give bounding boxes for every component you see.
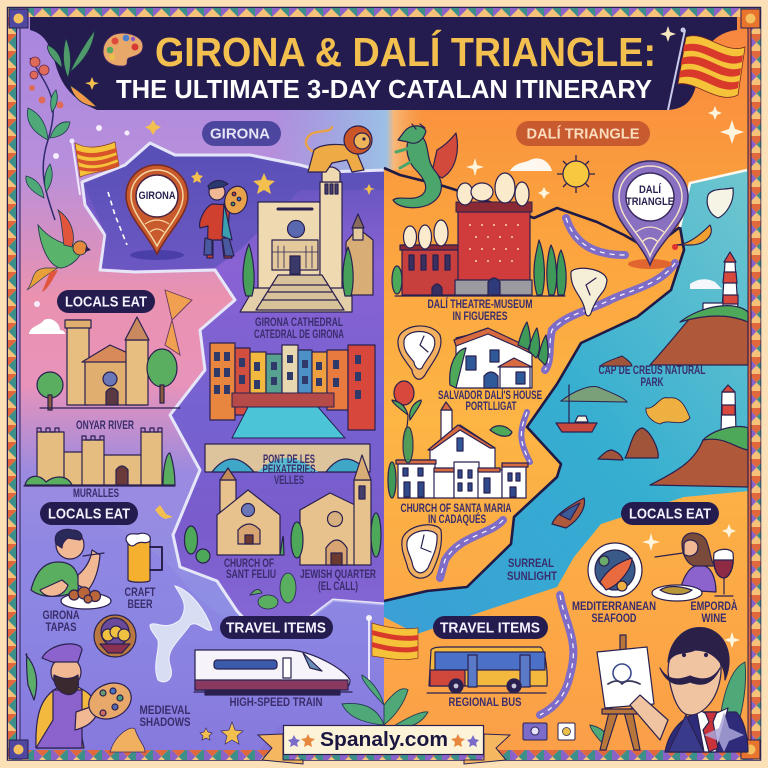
icon: Girona map pin: GIRONA [138,190,176,202]
stars lower left [200,722,243,744]
label: Medieval Shadows: MEDIEVAL [140,705,190,717]
icon: sparkle [85,77,99,90]
label: Pont de les Peixateries Velles: PEIXATERIES [262,464,316,476]
purple road 2 [545,263,675,370]
melting clock top [571,268,607,316]
high-speed train [194,650,352,695]
label: Girona Cathedral: CATEDRAL DE GIRONA [254,329,344,341]
map: province outline [82,143,384,625]
stone bridge [205,444,370,472]
stars [191,171,375,195]
label: Pont de les Peixateries Velles: PONT DE LES [263,454,315,466]
label: Surreal Sunlight: SUNLIGHT [507,571,557,583]
pill: Travel Items Dalí [433,616,548,639]
red tulip [392,381,421,440]
section pill: Girona: GIRONA [210,126,270,142]
map: Girona province [82,143,384,625]
icon: artist palette [103,33,143,66]
panel: Dalí side [384,17,749,752]
label: Church of Santa Maria [400,503,512,526]
icon: Girona map pin [126,165,188,260]
label: Jewish Quarter: (EL CALL) [318,581,358,593]
label: Empordà Wine: EMPORDÀ [690,600,738,613]
star [155,505,173,519]
label: High-Speed Train: HIGH-SPEED TRAIN [230,697,322,709]
basket [94,615,136,657]
label: Medieval Shadows [140,705,191,729]
Onyar River water [232,407,345,438]
label: Girona Cathedral [254,317,344,341]
film icon [558,723,575,740]
label: Church of Sant Feliu: CHURCH OF [224,558,274,570]
pill: Locals Eat 1 [57,290,155,313]
pill: Locals Eat 1: LOCALS EAT [65,294,147,310]
cliff lower [650,426,748,487]
label: Church of Santa Maria: CHURCH OF SANTA MARIA [400,503,512,515]
upper strip between Girona and Dalí sides [270,108,425,170]
sparkle badge [704,712,744,752]
label: Medieval Shadows: SHADOWS [140,717,191,729]
label: Surreal Sunlight [507,558,557,583]
road lower clock [440,520,503,578]
label: Muralles: MURALLES [73,488,119,500]
map: blue inner province shadow [84,146,384,270]
golden food on sea [646,398,690,424]
woman eating [652,533,716,601]
star [145,120,161,135]
label: Mediterranean Seafood: SEAFOOD [592,613,636,625]
icon: Catalan flag top right [660,26,745,110]
icon: tropical bird [27,210,91,292]
purple road north [566,218,625,255]
label: Cap de Creus: CAP DE CREUS NATURAL [598,365,706,377]
Dalí's house Portlligat [450,322,548,388]
title line 1: GIRONA & DALÍ TRIANGLE: [155,29,656,75]
road lane dashes [440,218,675,715]
Colourful houses along the Onyar [210,343,375,430]
label: Church of Sant Feliu [224,558,276,581]
Dalí Theatre-Museum [392,173,566,296]
painter figure [200,180,251,258]
label: Cap de Creus [598,365,706,389]
sparkles on orange [466,106,744,199]
title banner [30,17,737,110]
Girona leaf pile [110,728,145,752]
website banner: Spanaly.com [320,729,448,751]
label: Salvador Dalí's House: SALVADOR DALÍ'S HOUSE [438,389,542,402]
Salvador Dalí portrait [630,628,748,752]
label: Regional Bus: REGIONAL BUS [448,697,522,709]
label: Pont de les Peixateries Velles [262,454,316,487]
label: Cap de Creus: PARK [640,377,664,389]
small boat [552,498,584,528]
man eating tapas [31,529,111,609]
label: Jewish Quarter [300,569,376,593]
botanical branch [26,57,70,220]
label: Dalí Theatre-Museum [428,298,532,323]
label: Empordà Wine: WINE [702,613,727,625]
pill: Locals Eat 2: LOCALS EAT [48,506,130,522]
rocks in sea [598,428,658,460]
leaves on banner [48,30,95,78]
label: Craft Beer [124,587,156,611]
bottom leaves [342,662,746,745]
easel with moustache sketch [597,635,655,750]
arrow path near pin [108,192,127,245]
pill: Locals Eat 3: LOCALS EAT [629,506,711,522]
red footbridge [232,393,334,407]
icon: dragon [393,124,457,208]
sparkle [660,26,676,42]
Mediterranean seafood plate [588,543,642,597]
sailboat [556,385,597,432]
lighthouse lower [721,385,736,432]
section pill: Dalí Triangle: DALÍ TRIANGLE [526,126,640,142]
label: Girona Cathedral: GIRONA CATHEDRAL [255,317,343,329]
medieval church group [37,317,180,410]
label: Dalí Theatre-Museum: DALÍ THEATRE-MUSEUM [428,298,532,311]
road near house [521,412,530,462]
label: Mediterranean Seafood [572,601,656,625]
lower Girona lavender region [20,500,384,752]
melting clock bottom [402,525,441,578]
label: Empordà Wine [690,600,738,625]
city walls Muralles [24,428,175,486]
Church of Santa Maria Cadaqués [388,402,528,498]
painter with palette [26,644,137,748]
label: Pont de les Peixateries Velles: VELLES [274,475,304,487]
islet [561,387,627,402]
chapel [346,228,373,295]
icon: Dalí Triangle map pin: TRIANGLE [626,196,674,208]
sun [557,155,595,193]
label: Dalí Theatre-Museum: IN FIGUERES [452,311,508,323]
icon: Catalan flag left [70,138,119,195]
icon: centre Catalan flag [366,615,418,680]
Girona Cathedral [240,167,373,312]
title line 2: THE ULTIMATE 3-DAY CATALAN ITINERARY [116,74,652,104]
label: Girona Tapas: TAPAS [46,622,77,634]
label: Salvador Dalí's House: PORTLLIGAT [466,401,516,413]
cloud [29,319,65,334]
wine glass [714,549,733,596]
bird shape on pink [165,290,192,355]
icon: Dalí Triangle map pin [613,161,688,269]
map: Dalí coast and sea [384,170,749,634]
label: Girona Tapas [42,610,80,634]
icon: lion [306,126,372,172]
regional bus [427,647,547,693]
label: Onyar River: ONYAR RIVER [76,420,135,432]
camera icon [523,723,547,740]
label: Surreal Sunlight: SURREAL [508,558,554,570]
label: Craft Beer: CRAFT [124,587,156,599]
Church of Sant Feliu [184,468,284,563]
label: Mediterranean Seafood: MEDITERRANEAN [572,601,656,613]
label: Church of Sant Feliu: SANT FELIU [226,569,276,581]
label: Church of Santa Maria: IN CADAQUÉS [428,513,486,526]
pill: Travel Items Dalí: TRAVEL ITEMS [440,620,540,636]
road south [540,595,573,715]
pill: Locals Eat 2 [40,502,138,525]
label: Girona Tapas: GIRONA [42,610,80,622]
sparkle dots [34,125,130,307]
melting clock left [398,326,441,379]
label: Craft Beer: BEER [128,599,153,611]
clouds [510,158,552,171]
pill: Locals Eat 3 [621,502,719,525]
small rocks at cape [600,356,632,366]
red dot with flying brush [672,188,733,250]
section pill: Dalí Triangle [516,121,650,146]
Dalí-style white shape [150,586,212,682]
beer mug [126,533,162,582]
map: coastline [384,168,684,601]
pill: Travel Items Girona: TRAVEL ITEMS [226,620,326,636]
label: Salvador Dalí's House [438,389,542,413]
cloud sea [690,279,722,289]
cliff top [650,306,748,365]
sea edge highlight [680,170,747,227]
shrubs [250,573,296,609]
label: Jewish Quarter: JEWISH QUARTER [300,569,376,581]
sparkles lower right [642,524,740,648]
icon: Dalí Triangle map pin: DALÍ [639,183,662,196]
lighthouse top [703,252,738,312]
panel: Girona side [20,17,384,752]
website banner [258,726,510,764]
pill: Travel Items Girona [220,616,333,639]
section pill: Girona [202,121,281,146]
Jewish Quarter church [291,455,381,565]
